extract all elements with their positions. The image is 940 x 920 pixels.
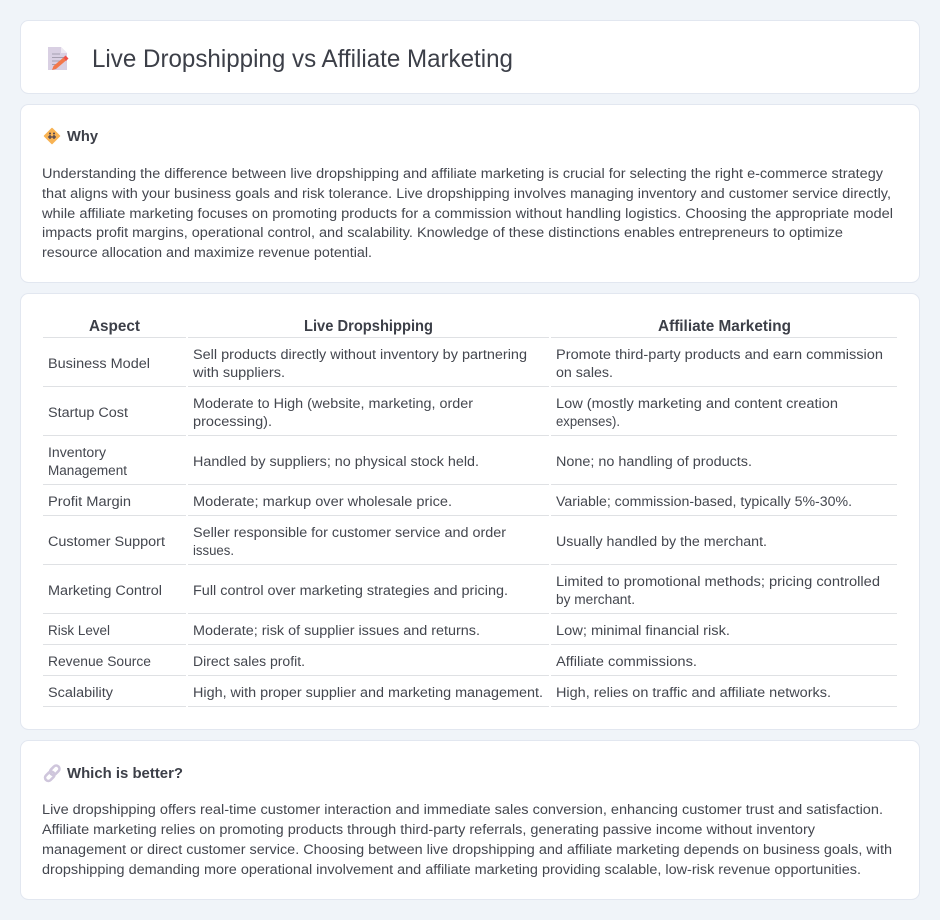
text block: why paragraph: that aligns with your business goals and risk tolerance. Live dropshipping involves managing inventory and customer service directly, (42, 186, 891, 202)
heading: why: Why (67, 128, 99, 145)
text block: which is better paragraph: dropshipping demanding more operational involvement and affiliate marketing providing scalable, low-risk revenue opportunities. (42, 862, 861, 878)
row: startup cost: expenses). (556, 414, 620, 430)
row: business model: Promote third-party products and earn commission (556, 347, 883, 363)
row: scalability: High, relies on traffic and affiliate networks. (556, 685, 831, 701)
table header: Live Dropshipping (304, 318, 433, 335)
row: revenue source: Direct sales profit. (193, 654, 305, 670)
row: marketing control: Limited to promotional methods; pricing controlled (556, 574, 880, 590)
row: customer support: Usually handled by the merchant. (556, 534, 767, 550)
text block: why paragraph: resource allocation and maximize revenue potential. (42, 245, 372, 261)
text block: why paragraph: while affiliate marketing focuses on promoting products for a commission without handling logistics. Choosing the appropriate model (41, 206, 893, 222)
row: profit margin: Profit Margin (48, 494, 131, 510)
row: customer support: Customer Support (48, 534, 165, 550)
text block: why paragraph (41, 166, 893, 261)
heading: which is better: Which is better? (67, 765, 183, 782)
row: marketing control (48, 574, 880, 608)
panel: which is better (20, 740, 920, 900)
icon: link (44, 764, 61, 782)
row: startup cost: Startup Cost (48, 405, 128, 421)
row: profit margin (48, 494, 852, 510)
row: scalability: Scalability (48, 685, 114, 701)
text block: which is better paragraph: Live dropshipping offers real-time customer interaction and immediate sales conversion, enhancing customer trust and satisfaction. (42, 802, 883, 818)
row: startup cost: processing). (193, 414, 272, 430)
row: inventory management (48, 445, 752, 479)
row: inventory management: Inventory (48, 445, 107, 461)
row: scalability: High, with proper supplier and marketing management. (193, 685, 543, 701)
row: business model (48, 347, 883, 381)
row: profit margin: Variable; commission-based, typically 5%-30%. (556, 494, 852, 510)
text block: which is better paragraph: Affiliate marketing relies on promoting products through third-party referrals, generating passive income without inventory (42, 822, 816, 838)
row: revenue source: Revenue Source (48, 654, 151, 670)
row: startup cost (48, 396, 838, 430)
row: revenue source (48, 654, 697, 670)
row: business model: Business Model (48, 356, 150, 372)
row: marketing control: Marketing Control (48, 583, 162, 599)
row: risk level (48, 623, 730, 639)
panel: header (20, 20, 920, 94)
text block: which is better paragraph: management or direct customer service. Choosing between live dropshipping and affiliate marketing depends on business goals, with (42, 842, 892, 858)
row: customer support: issues. (193, 543, 234, 559)
row: risk level: Low; minimal financial risk. (556, 623, 730, 639)
row: marketing control: by merchant. (556, 592, 635, 608)
row: business model: on sales. (556, 365, 613, 381)
row: startup cost: Low (mostly marketing and content creation (556, 396, 838, 412)
row: startup cost: Moderate to High (website, marketing, order (193, 396, 473, 412)
row: business model: with suppliers. (192, 365, 285, 381)
table header: Affiliate Marketing (658, 318, 791, 335)
row: customer support (48, 525, 767, 559)
row: risk level: Moderate; risk of supplier issues and returns. (193, 623, 480, 639)
row: customer support: Seller responsible for customer service and order (193, 525, 506, 541)
panel: comparison table (20, 294, 920, 730)
table header: Aspect (89, 318, 140, 335)
row: risk level: Risk Level (48, 623, 110, 639)
row: business model: Sell products directly without inventory by partnering (193, 347, 527, 363)
icon: road sign diamond (44, 128, 60, 144)
row: inventory management: Management (48, 463, 127, 479)
row: scalability (48, 685, 831, 701)
row: profit margin: Moderate; markup over wholesale price. (193, 494, 452, 510)
row: inventory management: Handled by suppliers; no physical stock held. (193, 454, 479, 470)
table header (89, 318, 791, 335)
panel: why (20, 104, 920, 282)
row: marketing control: Full control over marketing strategies and pricing. (193, 583, 508, 599)
text block: why paragraph: Understanding the difference between live dropshipping and affiliate marketing is crucial for selecting the right e-commerce strategy (42, 166, 884, 182)
icon: document with pencil (48, 47, 68, 70)
text block: why paragraph: impacts profit margins, operational control, and scalability. Knowledge of these distinctions enables entrepreneurs to optimize (42, 225, 843, 241)
title: Live Dropshipping vs Affiliate Marketing (92, 45, 513, 73)
table grid lines (43, 337, 897, 707)
text block: which is better paragraph (42, 802, 892, 878)
row: inventory management: None; no handling of products. (556, 454, 752, 470)
row: revenue source: Affiliate commissions. (556, 654, 697, 670)
